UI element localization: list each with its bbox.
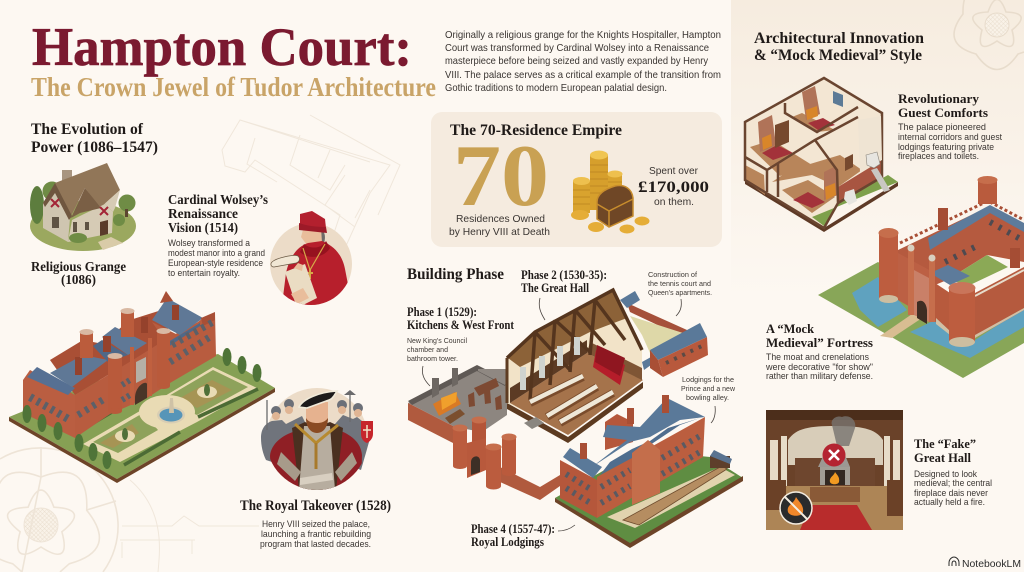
text: royal takeover: Henry VIII seized the palace,	[262, 519, 370, 529]
text: fake great hall: medieval; the central	[914, 478, 992, 488]
note: tennis court: Queen’s apartments.	[648, 288, 712, 297]
label: religious grange: Religious Grange	[31, 259, 126, 274]
text: mock medieval fortress: rather than military defense.	[766, 371, 873, 381]
text: fake great hall	[914, 436, 992, 507]
fountain	[157, 406, 185, 424]
heading: evolution of power	[31, 121, 158, 156]
text: guest comforts: fireplaces and toilets.	[898, 151, 979, 161]
illustration: kitchens and gatehouse	[408, 365, 560, 500]
text: cardinal wolsey: Cardinal Wolsey’s	[168, 192, 268, 207]
decorative blueprint	[222, 115, 400, 248]
walls	[745, 78, 882, 228]
shield	[361, 421, 373, 443]
stat: spending: on them.	[654, 197, 694, 208]
illustration: guest lodging cutaway	[745, 78, 898, 232]
note: tennis court: Construction of	[648, 270, 698, 279]
arrow: phase 4	[558, 525, 575, 531]
trees	[22, 348, 262, 469]
logo: NotebookLM: NotebookLM	[962, 559, 1021, 570]
roofs	[27, 367, 75, 395]
text: mock medieval fortress: The moat and crenelations	[766, 352, 869, 362]
number caption: Residences Owned	[456, 214, 545, 225]
text: fake great hall: Great Hall	[914, 450, 971, 465]
courtyard	[947, 255, 1008, 285]
stat: spending: £170,000	[638, 179, 709, 196]
label: phase 4: Royal Lodgings	[471, 535, 544, 549]
decorative rose: top right	[954, 0, 1024, 70]
label: phase 4	[471, 522, 555, 549]
note: lodgings: Prince and a new	[681, 384, 735, 393]
text: guest comforts	[898, 91, 1002, 161]
bridge	[880, 312, 925, 338]
heading: architectural innovation: & “Mock Medieval” Style	[754, 47, 922, 64]
label: religious grange	[31, 259, 126, 287]
logo: NotebookLM	[949, 557, 1021, 570]
ground and moat	[818, 262, 1024, 378]
text: fake great hall: Designed to look	[914, 469, 977, 479]
intro text: Gothic traditions to modern European palatial design.	[445, 83, 667, 94]
icon: gold coins and chest	[571, 150, 650, 234]
towers	[879, 233, 898, 299]
text: cardinal wolsey	[168, 192, 268, 278]
note: phase 1: New King’s Council	[407, 336, 467, 345]
label: phase 1: Kitchens & West Front	[407, 318, 515, 332]
number caption	[449, 214, 550, 238]
rear structure	[898, 206, 1024, 285]
label: phase 1: Phase 1 (1529):	[407, 305, 477, 319]
heading: evolution of power: Power (1086–1547)	[31, 139, 158, 156]
intro text: masterpiece before being seized and vastly expanded by Henry	[445, 56, 709, 67]
stat: spending: Spent over	[649, 166, 699, 177]
illustration: royal lodgings and bowling alley	[555, 395, 743, 548]
text: cardinal wolsey: modest manor into a grand	[168, 248, 265, 258]
hedges	[90, 366, 258, 465]
chimneys and towers	[75, 357, 82, 375]
label: phase 1	[407, 305, 515, 332]
note: tennis court: the tennis court and	[648, 279, 711, 288]
illustration: fake great hall interior	[766, 410, 903, 530]
label: religious grange: (1086)	[61, 272, 96, 287]
intro text: VIII. The palace serves as a critical example of the transition from	[445, 70, 721, 81]
heading: building phase: Building Phase	[407, 266, 504, 283]
text: royal takeover: launching a frantic rebuilding	[261, 529, 371, 539]
illustration: tennis court and queen's apartments	[620, 291, 708, 377]
heading: evolution of power: The Evolution of	[31, 121, 144, 138]
text: guest comforts: The palace pioneered	[898, 122, 986, 132]
arrow: tennis court	[676, 299, 681, 316]
text: guest comforts: lodgings featuring private	[898, 142, 994, 152]
note: phase 1: chamber and	[407, 345, 448, 354]
text: guest comforts: Guest Comforts	[898, 105, 988, 120]
garden paths	[83, 367, 257, 462]
text: fake great hall: actually held a fire.	[914, 497, 985, 507]
label: phase 2	[521, 268, 607, 295]
illustration: palace aerial view	[9, 291, 275, 483]
heading: architectural innovation	[754, 30, 924, 64]
note: lodgings: Lodgings for the	[682, 375, 734, 384]
windows	[30, 397, 70, 420]
text: guest comforts: Revolutionary	[898, 91, 979, 106]
arrow: phase 2	[539, 298, 545, 320]
text: cardinal wolsey: European-style residence	[168, 258, 263, 268]
panel heading: The 70-Residence Empire	[450, 122, 622, 139]
intro text: Originally a religious grange for the Knights Hospitaller, Hampton	[445, 30, 721, 41]
text: mock medieval fortress: were decorative "for show"	[765, 362, 873, 372]
note: lodgings	[681, 375, 735, 402]
text: royal takeover	[240, 498, 391, 549]
rear ranges	[100, 308, 168, 375]
floors	[745, 113, 862, 213]
illustration: mock medieval fortress	[818, 176, 1024, 378]
ground	[9, 354, 275, 479]
label: phase 4: Phase 4 (1557-47):	[471, 522, 555, 536]
text: fake great hall: fireplace dais never	[914, 488, 988, 498]
note: lodgings: bowling alley.	[686, 393, 729, 402]
text: fake great hall: The “Fake”	[914, 436, 976, 451]
label: phase 2: Phase 2 (1530-35):	[521, 268, 607, 282]
note: tennis court	[648, 270, 712, 297]
portrait: henry VIII with guards	[261, 388, 373, 492]
text: cardinal wolsey: Renaissance	[168, 206, 238, 221]
icon: religious grange cottage	[30, 163, 136, 251]
intro text	[445, 30, 721, 94]
big number 70: 70	[453, 128, 549, 225]
stat: spending	[638, 166, 709, 208]
title: Hampton Court:	[32, 17, 412, 77]
subtitle: The Crown Jewel of Tudor Architecture	[31, 72, 436, 102]
label: phase 2: The Great Hall	[521, 281, 589, 295]
title	[31, 17, 436, 102]
text: royal takeover: program that lasted decades.	[260, 539, 371, 549]
text: guest comforts: internal corridors and guest	[898, 132, 1002, 142]
heading: architectural innovation: Architectural Innovation	[754, 30, 924, 47]
text: cardinal wolsey: to entertain royalty.	[168, 268, 240, 278]
text: mock medieval fortress	[765, 321, 873, 381]
arrow: lodgings	[711, 406, 715, 423]
text: royal takeover: The Royal Takeover (1528)	[240, 498, 391, 514]
text: mock medieval fortress: Medieval” Fortress	[766, 335, 873, 350]
intro text: Court was transformed by Cardinal Wolsey into a Renaissance	[445, 43, 709, 54]
number caption: by Henry VIII at Death	[449, 227, 550, 238]
illustration: the great hall	[507, 290, 643, 443]
front walls	[898, 253, 933, 320]
note: phase 1: bathroom tower.	[407, 354, 458, 363]
note: phase 1	[407, 336, 467, 363]
decorative rose: bottom left	[0, 447, 259, 572]
text: mock medieval fortress: A “Mock	[766, 321, 815, 336]
face and hat	[306, 402, 328, 431]
text: cardinal wolsey: Wolsey transformed a	[168, 238, 251, 248]
panel: the 70-residence empire	[431, 112, 722, 247]
text: cardinal wolsey: Vision (1514)	[168, 220, 238, 235]
arrow: phase 1	[422, 366, 430, 386]
main walls	[75, 313, 216, 438]
portrait: cardinal wolsey	[270, 211, 352, 308]
guards	[261, 416, 310, 462]
